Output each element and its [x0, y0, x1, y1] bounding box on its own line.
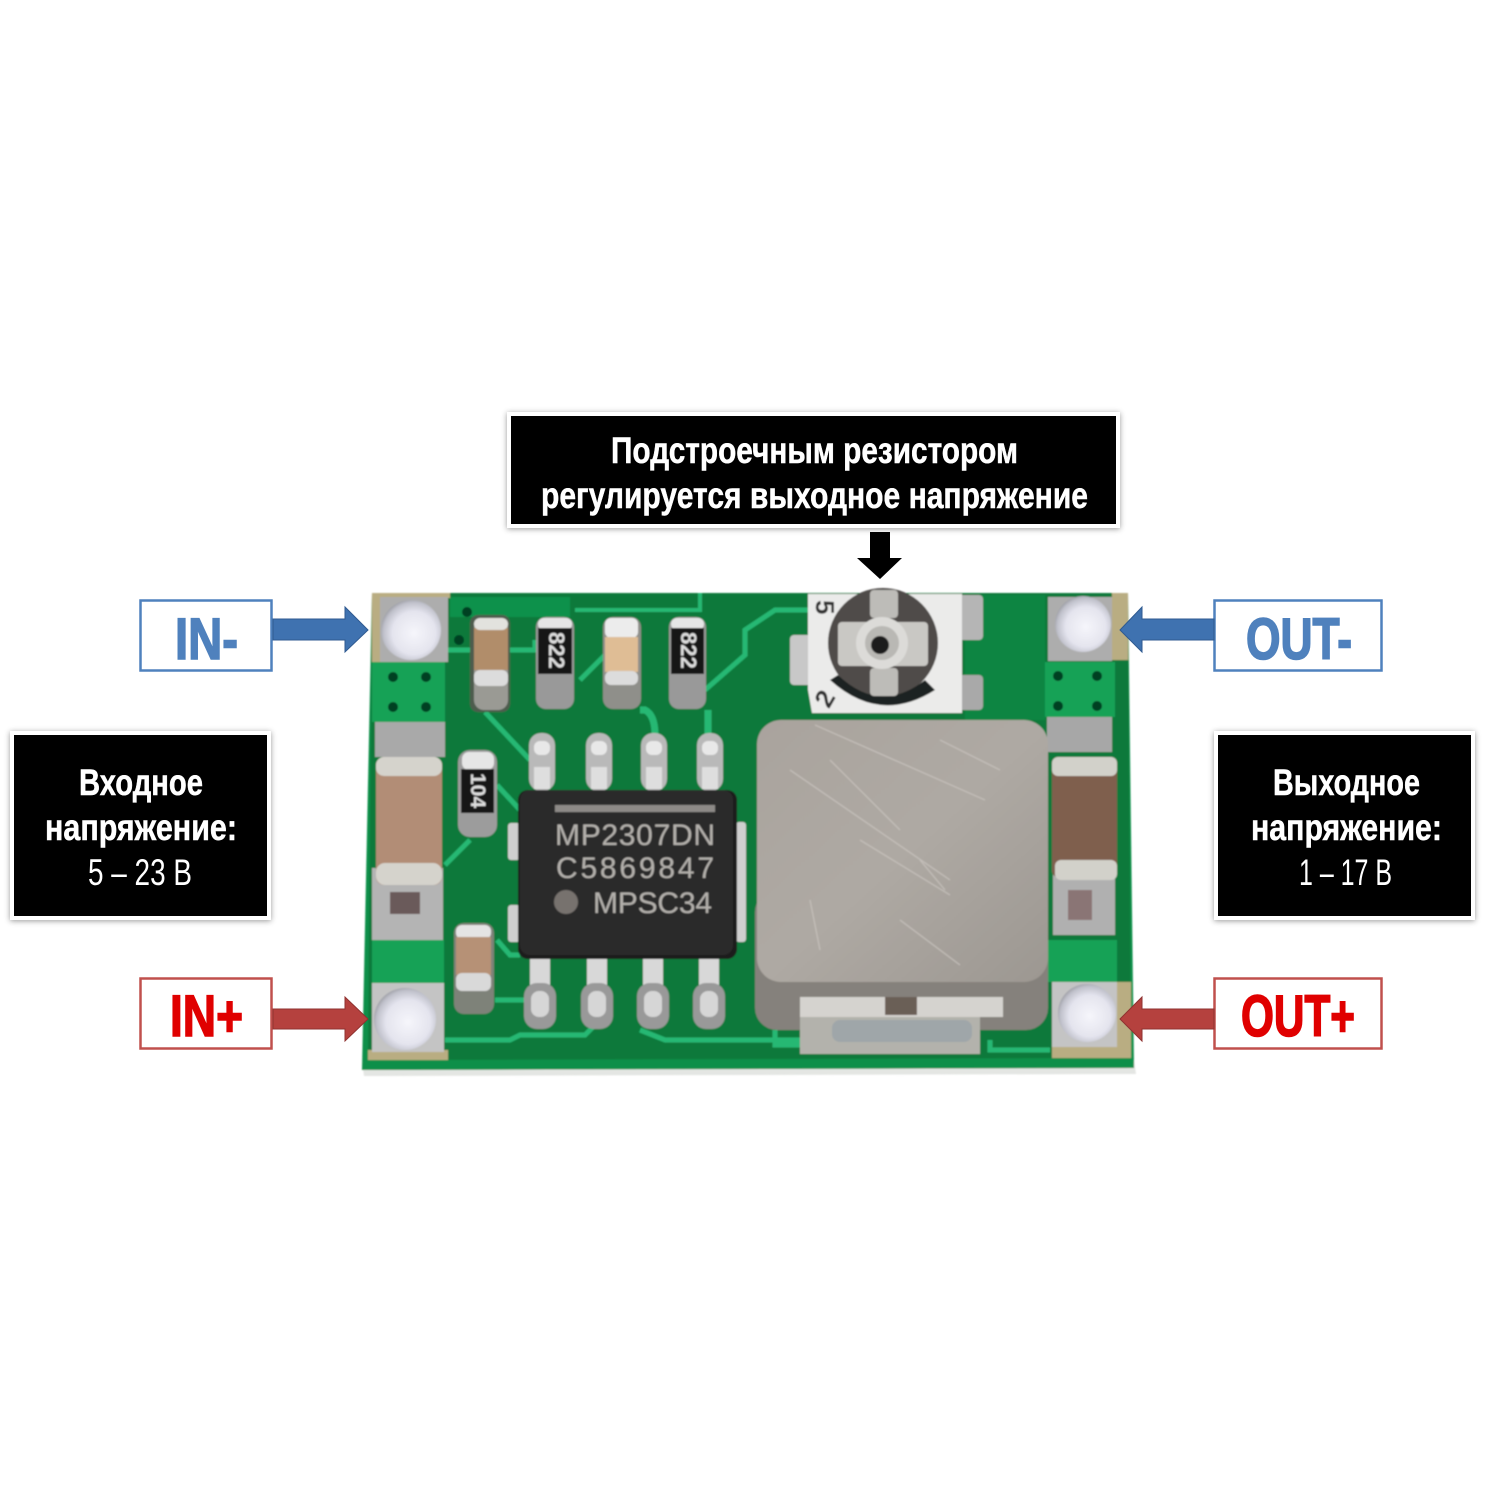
callout: trimmer resistor	[509, 414, 1118, 526]
label: OUT-: OUT-	[1246, 607, 1352, 672]
resistor 822 right: 822	[676, 632, 701, 669]
resistor 822 left	[536, 617, 574, 709]
label: IN+: IN+	[170, 984, 243, 1049]
bright green strips	[372, 662, 445, 722]
resistor 822 right	[669, 617, 706, 709]
green substrate	[362, 593, 1134, 1070]
capacitor C1	[470, 615, 510, 712]
arrow: IN+	[273, 997, 368, 1041]
IC chip MP2307DN: C5869847	[556, 852, 714, 885]
terminal pad: OUT-	[1048, 593, 1128, 661]
resistor 104: 104	[466, 773, 489, 808]
vias	[388, 607, 1102, 712]
trimmer resistor	[790, 588, 983, 713]
terminal pad: IN+	[368, 983, 448, 1060]
arrow: IN-	[273, 607, 368, 652]
callout: input voltage: 5 – 23 В	[88, 852, 192, 893]
board edge	[362, 1060, 1136, 1076]
callout: trimmer resistor: регулируется выходное напряжение	[541, 475, 1088, 516]
copper traces	[445, 593, 1050, 1050]
callout: output voltage: 1 – 17 В	[1299, 852, 1392, 893]
label: OUT+: OUT+	[1241, 984, 1355, 1049]
arrow: to trimmer	[857, 532, 902, 579]
callout: input voltage	[12, 733, 269, 918]
right capacitor	[1047, 717, 1117, 935]
callout: output voltage: напряжение:	[1251, 807, 1442, 848]
left capacitor	[372, 722, 445, 940]
pcb board	[362, 588, 1136, 1076]
terminal pad: OUT+	[1052, 982, 1131, 1058]
callout: input voltage: Входное	[79, 762, 203, 803]
label: IN-	[140, 600, 272, 672]
resistor 822 left: 822	[544, 632, 569, 669]
IC chip MP2307DN: MPSC34	[593, 887, 712, 920]
IC chip MP2307DN: MP2307DN	[555, 819, 715, 852]
terminal pad: IN-	[372, 593, 450, 662]
callout: trimmer resistor: Подстроечным резистором	[611, 430, 1018, 471]
inductor	[755, 720, 1048, 1054]
IC chip MP2307DN	[518, 790, 737, 959]
callout: output voltage	[1216, 733, 1473, 918]
arrow: OUT-	[1120, 607, 1214, 652]
label: IN+	[140, 978, 272, 1049]
callout: input voltage: напряжение:	[45, 807, 237, 848]
label: IN-: IN-	[175, 607, 238, 672]
trimmer resistor: 5	[810, 600, 840, 614]
capacitor C2	[603, 617, 641, 709]
arrow: OUT+	[1120, 997, 1214, 1041]
resistor 104	[458, 750, 497, 837]
callout: output voltage: Выходное	[1273, 762, 1420, 803]
trimmer resistor: 2	[808, 685, 841, 712]
capacitor C3	[454, 923, 494, 1014]
IC pins	[508, 733, 746, 1029]
